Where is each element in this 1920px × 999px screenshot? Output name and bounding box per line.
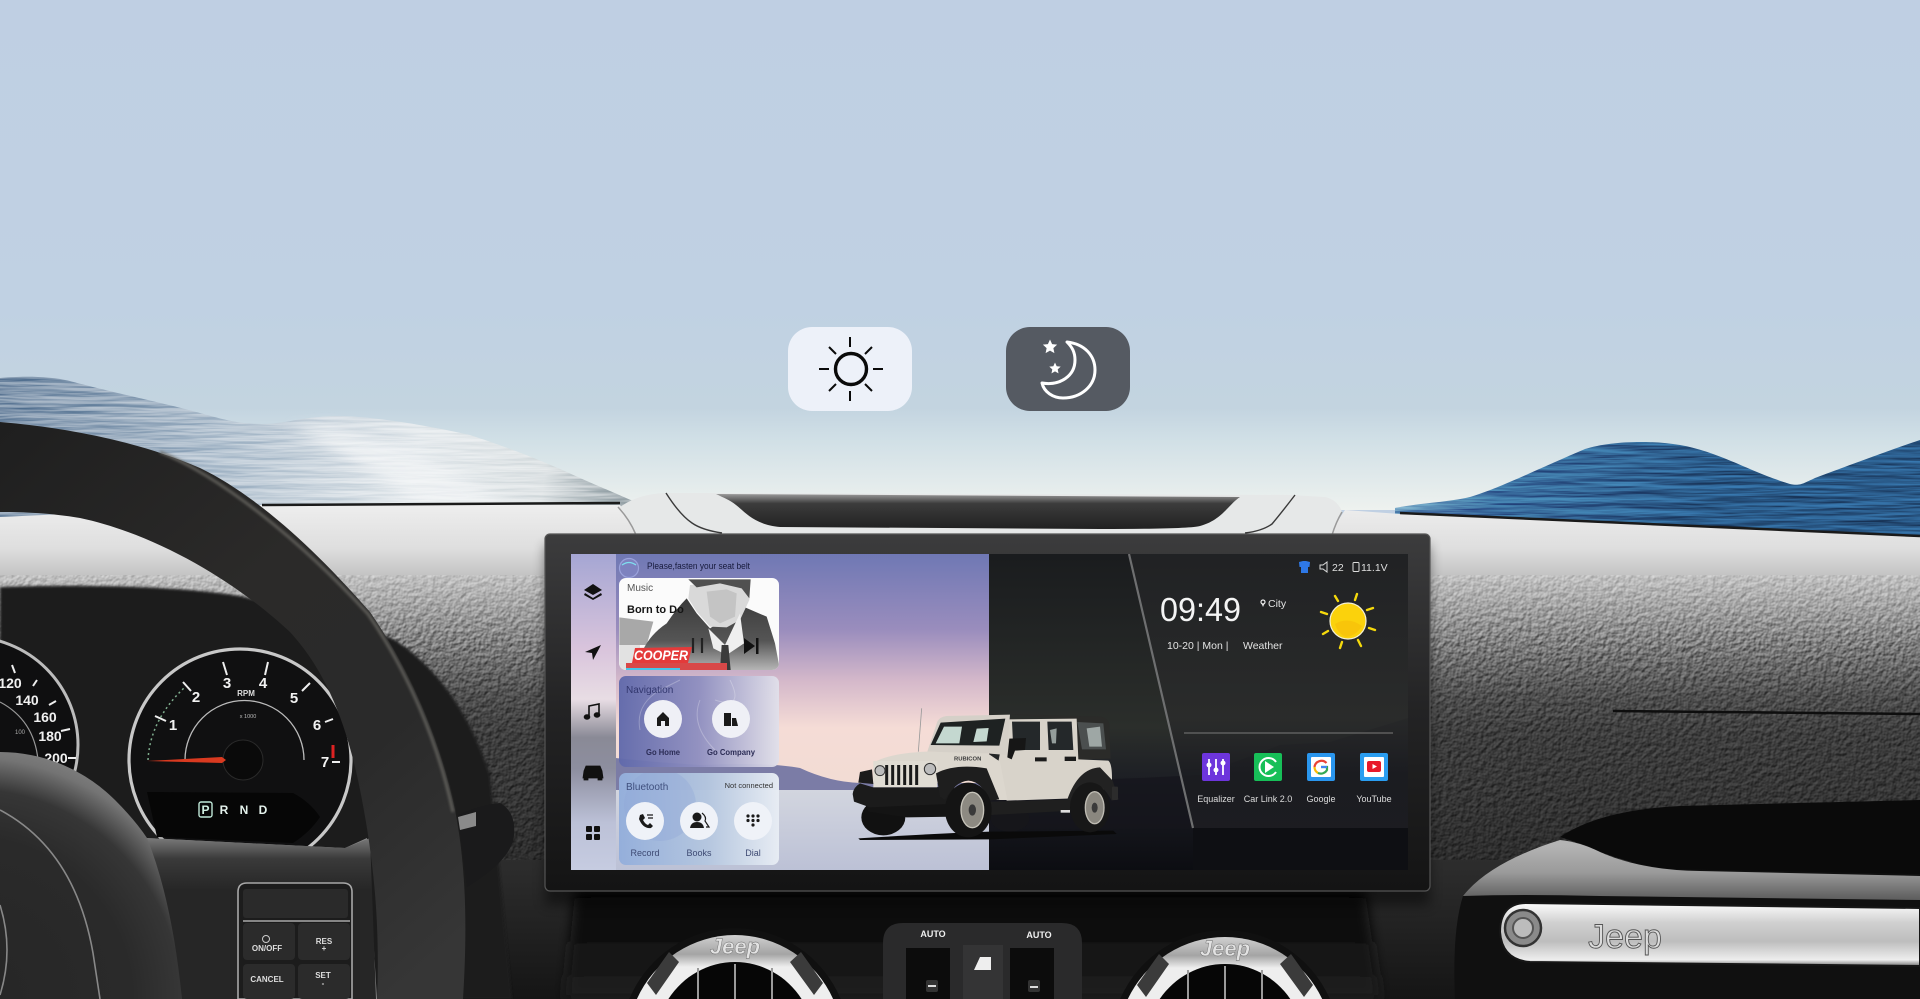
panel: bluetooth card (619, 769, 779, 865)
icon: pause (693, 638, 702, 653)
steering wheel spoke (147, 838, 376, 999)
glove box (1454, 800, 1920, 999)
clock: 09:49 (1160, 591, 1241, 628)
steering wheel (0, 422, 465, 999)
map route lines (639, 680, 735, 750)
head unit bezel (545, 534, 1430, 891)
city label (1260, 599, 1286, 609)
cruise control button pad: + (322, 944, 327, 953)
front wheel (945, 783, 992, 837)
bluetooth heading: Bluetooth (626, 782, 668, 793)
dashboard top edge line (262, 503, 1920, 536)
tachometer gauge: 3 (223, 675, 231, 692)
dial button (734, 802, 772, 858)
mountains: left snowy range (0, 377, 642, 530)
glove box handle recess (1560, 800, 1920, 874)
button: night mode (1006, 327, 1130, 411)
left fender flare (858, 769, 873, 784)
instrument cluster hood (0, 586, 512, 999)
dial button: Dial (745, 848, 761, 858)
centre console (565, 891, 1380, 999)
steering wheel rim highlight (160, 452, 453, 812)
icon: layers (584, 584, 602, 600)
hair (688, 579, 751, 598)
ground shadow (858, 831, 1117, 840)
go home button (644, 700, 682, 757)
icon: navigation arrow (585, 645, 601, 660)
icon: car (583, 766, 603, 780)
status bar (1299, 561, 1388, 574)
rear bumper (1112, 787, 1118, 800)
tachometer gauge (129, 649, 351, 871)
icon: app grid (586, 826, 600, 840)
grille (873, 761, 937, 787)
app labels: Equalizer (1197, 794, 1235, 804)
window switch panel: AUTO (920, 929, 946, 939)
front bumper (853, 782, 957, 807)
icon: youtube app (1360, 753, 1388, 781)
status bar: 11.1V (1361, 562, 1388, 574)
rear wheel (1070, 782, 1110, 832)
centre vent hood (618, 493, 1342, 535)
tachometer gauge: 6 (313, 717, 321, 734)
album brand label (626, 647, 727, 671)
rockers highlight (1061, 810, 1070, 813)
icon: equalizer app (1202, 753, 1230, 781)
tachometer gauge: R (220, 803, 229, 817)
album photo (619, 579, 780, 670)
go company button (707, 700, 755, 757)
icon: google app (1307, 753, 1335, 781)
hood (873, 752, 1007, 800)
glove box shelf (1463, 840, 1920, 900)
speedometer gauge: 100 (15, 730, 26, 736)
front fender (936, 767, 999, 801)
icon: car link app (1254, 753, 1282, 781)
icon: sun (819, 337, 883, 401)
speedometer gauge: 160 (33, 709, 57, 725)
display screen (571, 554, 1408, 870)
head unit shadow (545, 545, 1430, 905)
icon: weather sun (1321, 594, 1375, 648)
side step (990, 799, 1075, 815)
tachometer gauge: RPM (237, 689, 255, 698)
left air vent (629, 928, 841, 999)
left air vent: Jeep (710, 934, 760, 959)
chrome Jeep handle: Jeep (1588, 918, 1662, 956)
panel: music card (619, 578, 780, 671)
steering wheel chrome ring (0, 810, 100, 999)
tachometer gauge: 7 (321, 754, 329, 771)
cruise control button pad: - (322, 979, 325, 988)
record button: Record (630, 848, 660, 858)
shirt collar (708, 613, 744, 655)
far side wheels (861, 799, 905, 835)
app labels: YouTube (1356, 794, 1392, 804)
tachometer gauge: 4 (259, 675, 268, 692)
music title text: Music (627, 583, 653, 594)
panel: dark mode half (989, 554, 1408, 870)
panel edge line (1129, 554, 1193, 828)
cruise control button pad: SET (315, 971, 331, 980)
side windows (1012, 722, 1073, 750)
seat belt notice: Please,fasten your seat belt (647, 561, 750, 571)
scene: car dashboard with display (0, 327, 1920, 999)
model badge: RUBICON (954, 757, 981, 763)
panel: light mode half (571, 554, 989, 870)
jeep wrangler vehicle (853, 708, 1119, 840)
antenna (918, 708, 922, 752)
app labels: Car Link 2.0 (1244, 794, 1292, 804)
go home button: Go Home (646, 747, 680, 757)
dashboard leather texture (0, 575, 1920, 860)
window switch panel: AUTO (1026, 930, 1052, 940)
song title: Born to Do (627, 604, 684, 616)
assistant orb (620, 558, 638, 578)
connection status: Not connected (725, 781, 773, 790)
cruise control button pad: ON/OFF (252, 944, 282, 953)
record button (626, 802, 664, 858)
dashboard seam line (1613, 711, 1920, 714)
body side (997, 719, 1112, 801)
icon: moon and stars (1042, 340, 1095, 398)
button: day mode (788, 327, 912, 411)
face (688, 580, 749, 627)
chrome Jeep handle (1500, 903, 1920, 966)
panel: navigation card (619, 676, 779, 767)
speedometer gauge: 200 (44, 750, 68, 766)
window switch panel (883, 923, 1082, 999)
windshield frame (927, 715, 1010, 755)
turn signal stalk (458, 803, 514, 887)
tachometer gauge: 1 (169, 717, 177, 734)
background building (619, 617, 653, 645)
tilted glass panel (1274, 718, 1408, 748)
lilac mountains (616, 758, 983, 790)
jacket (637, 598, 780, 670)
go company button: Go Company (707, 747, 755, 757)
sidebar (571, 554, 616, 870)
mountains: right blue range (1395, 440, 1920, 540)
status bar: 22 (1332, 562, 1344, 574)
mountain surface texture (0, 377, 1920, 534)
tachometer gauge: 5 (290, 690, 298, 707)
navigation heading: Navigation (626, 685, 673, 696)
lower dark band (1193, 828, 1408, 870)
chassis (863, 800, 957, 817)
city label: City (1268, 598, 1287, 610)
dashboard body (0, 505, 1920, 999)
cruise control button pad: CANCEL (250, 975, 284, 984)
earbud watermark (624, 769, 696, 841)
windshield glass (931, 719, 1005, 746)
speedometer gauge (0, 637, 78, 853)
speedometer gauge: 180 (38, 728, 62, 744)
door handles (1035, 757, 1076, 761)
icon: music note (584, 704, 600, 719)
tachometer gauge: 2 (192, 689, 200, 706)
books button: Books (686, 848, 712, 858)
headlamps (875, 766, 885, 776)
right air vent: Jeep (1200, 936, 1250, 961)
app labels (1198, 796, 1392, 804)
weather label: Weather (1243, 640, 1283, 652)
steering wheel rim (0, 422, 465, 999)
cruise control button pad (238, 883, 352, 999)
steering wheel hub (0, 752, 377, 999)
tachometer gauge: P (201, 803, 210, 817)
app labels: Google (1306, 794, 1336, 804)
hard top (1008, 714, 1111, 759)
dark mountain silhouette (1170, 776, 1171, 777)
glove box lower panel (1454, 860, 1920, 999)
tachometer gauge: N (240, 803, 248, 817)
background sky (0, 0, 1920, 510)
right air vent (1120, 930, 1330, 999)
books button (680, 802, 718, 858)
date: 10-20 | Mon | (1167, 640, 1228, 652)
mirror (1007, 738, 1026, 759)
tachometer gauge: D (259, 803, 268, 817)
divider (1184, 732, 1393, 734)
cruise control button pad: RES (316, 937, 333, 946)
rear fender (1067, 767, 1119, 801)
icon: next track (744, 638, 758, 654)
tachometer gauge: x 1000 (240, 714, 256, 720)
album brand label: COOPER (634, 647, 689, 663)
speedometer gauge: 140 (15, 692, 39, 708)
